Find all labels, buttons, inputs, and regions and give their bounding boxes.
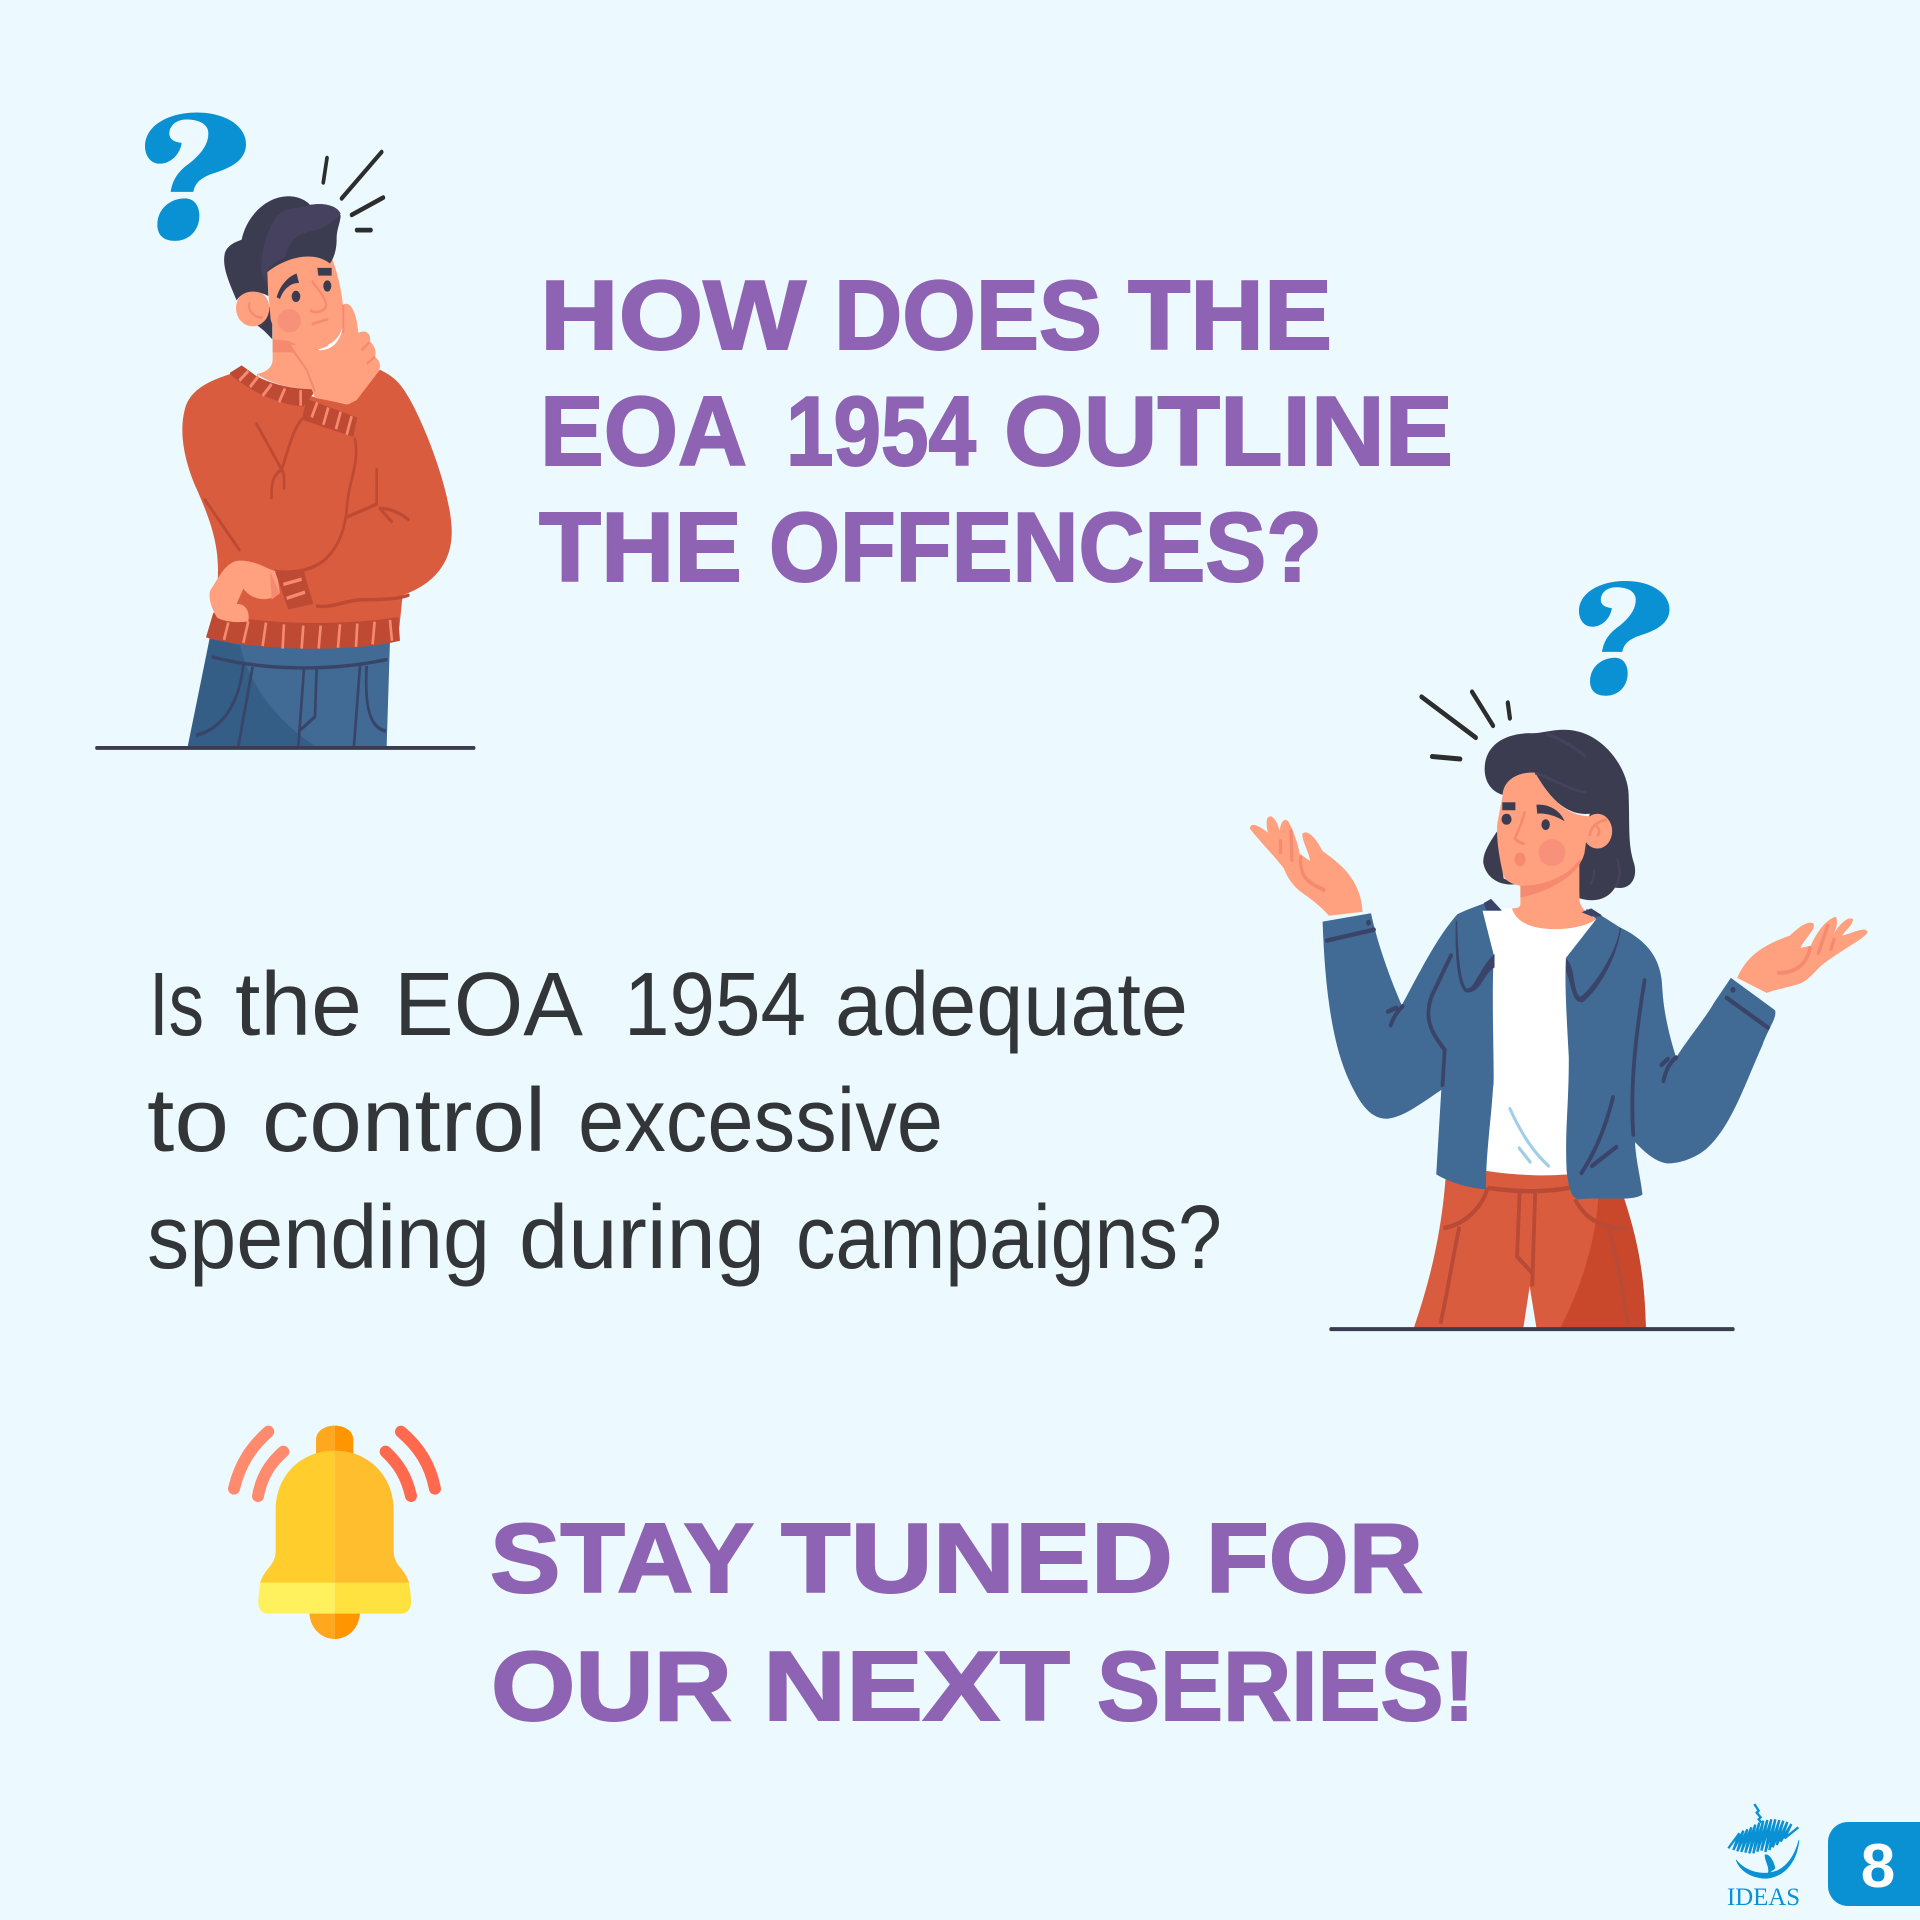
facial features bbox=[277, 268, 332, 332]
collar bbox=[230, 365, 317, 407]
body question text bbox=[147, 955, 1222, 1288]
lower cuff bbox=[275, 569, 313, 610]
icon: question mark above man bbox=[145, 112, 246, 241]
heading: how does the EOA outline the offences bbox=[539, 260, 1453, 602]
heading: how does the EOA outline the offences: THE bbox=[1128, 260, 1332, 370]
page number badge: 8 bbox=[1861, 1832, 1895, 1901]
body question text: during bbox=[519, 1188, 765, 1288]
heading: stay tuned: TUNED bbox=[781, 1503, 1173, 1613]
t-shirt bbox=[1483, 908, 1596, 1175]
ground line bbox=[1331, 1325, 1733, 1333]
body question text: adequate bbox=[835, 955, 1188, 1055]
jacket right bbox=[1565, 909, 1775, 1199]
hand on hip bbox=[210, 561, 280, 622]
icon: bell bbox=[234, 1426, 435, 1639]
heading: stay tuned: STAY bbox=[490, 1503, 754, 1613]
body question text: control bbox=[262, 1071, 546, 1171]
hand on chin bbox=[290, 304, 380, 404]
heading: stay tuned: FOR bbox=[1206, 1503, 1423, 1613]
heading: how does the EOA outline the offences: OFFENCES? bbox=[769, 492, 1322, 602]
body question text: Is bbox=[149, 955, 204, 1055]
left raised hand bbox=[1250, 816, 1363, 916]
face bbox=[1497, 773, 1590, 886]
logo: IDEAS bbox=[1727, 1804, 1800, 1911]
hair nape bbox=[248, 307, 272, 339]
illustration: thinking man bbox=[97, 152, 474, 748]
heading: how does the EOA outline the offences: 1954 bbox=[786, 376, 976, 486]
body question text: 1954 bbox=[624, 955, 806, 1055]
jacket left bbox=[1323, 901, 1501, 1189]
hair back bbox=[1485, 730, 1635, 900]
sweater bbox=[182, 370, 452, 628]
heading: stay tuned: NEXT bbox=[763, 1631, 1070, 1741]
heading: stay tuned bbox=[490, 1503, 1475, 1741]
icon: question mark above woman bbox=[1579, 581, 1669, 696]
sweater folds bbox=[205, 420, 408, 606]
body question text: spending bbox=[147, 1188, 490, 1288]
body question text: excessive bbox=[578, 1071, 943, 1171]
action lines bbox=[323, 152, 383, 230]
neck bbox=[257, 307, 333, 389]
jacket hood shadows bbox=[1456, 900, 1621, 1001]
sweater hem bbox=[206, 613, 400, 649]
heading: stay tuned: OUR bbox=[491, 1631, 732, 1741]
action lines bbox=[1422, 692, 1510, 759]
hair bbox=[224, 196, 341, 300]
body question text: campaigns? bbox=[796, 1188, 1222, 1288]
page number badge bbox=[1828, 1822, 1920, 1906]
heading: stay tuned: SERIES! bbox=[1097, 1631, 1475, 1741]
body question text: EOA bbox=[394, 955, 583, 1055]
heading: how does the EOA outline the offences: EOA bbox=[540, 376, 747, 486]
heading: how does the EOA outline the offences: THE bbox=[539, 492, 742, 602]
head bbox=[267, 253, 344, 349]
neck bbox=[1511, 858, 1596, 929]
body question text: to bbox=[147, 1071, 229, 1171]
heading: how does the EOA outline the offences: OUTLINE bbox=[1004, 376, 1453, 486]
illustration: shrugging woman bbox=[1250, 692, 1868, 1329]
facial features bbox=[1501, 734, 1620, 887]
jeans bbox=[188, 636, 390, 747]
heading: how does the EOA outline the offences: HOW bbox=[540, 260, 807, 370]
jacket seams bbox=[1327, 930, 1768, 1173]
right raised hand bbox=[1737, 917, 1868, 993]
trousers bbox=[1414, 1171, 1646, 1328]
logo: IDEAS: IDEAS bbox=[1727, 1884, 1800, 1911]
upper cuff bbox=[302, 399, 357, 437]
ground line bbox=[97, 743, 474, 752]
body question text: the bbox=[235, 955, 362, 1055]
heading: how does the EOA outline the offences: DOES bbox=[834, 260, 1102, 370]
